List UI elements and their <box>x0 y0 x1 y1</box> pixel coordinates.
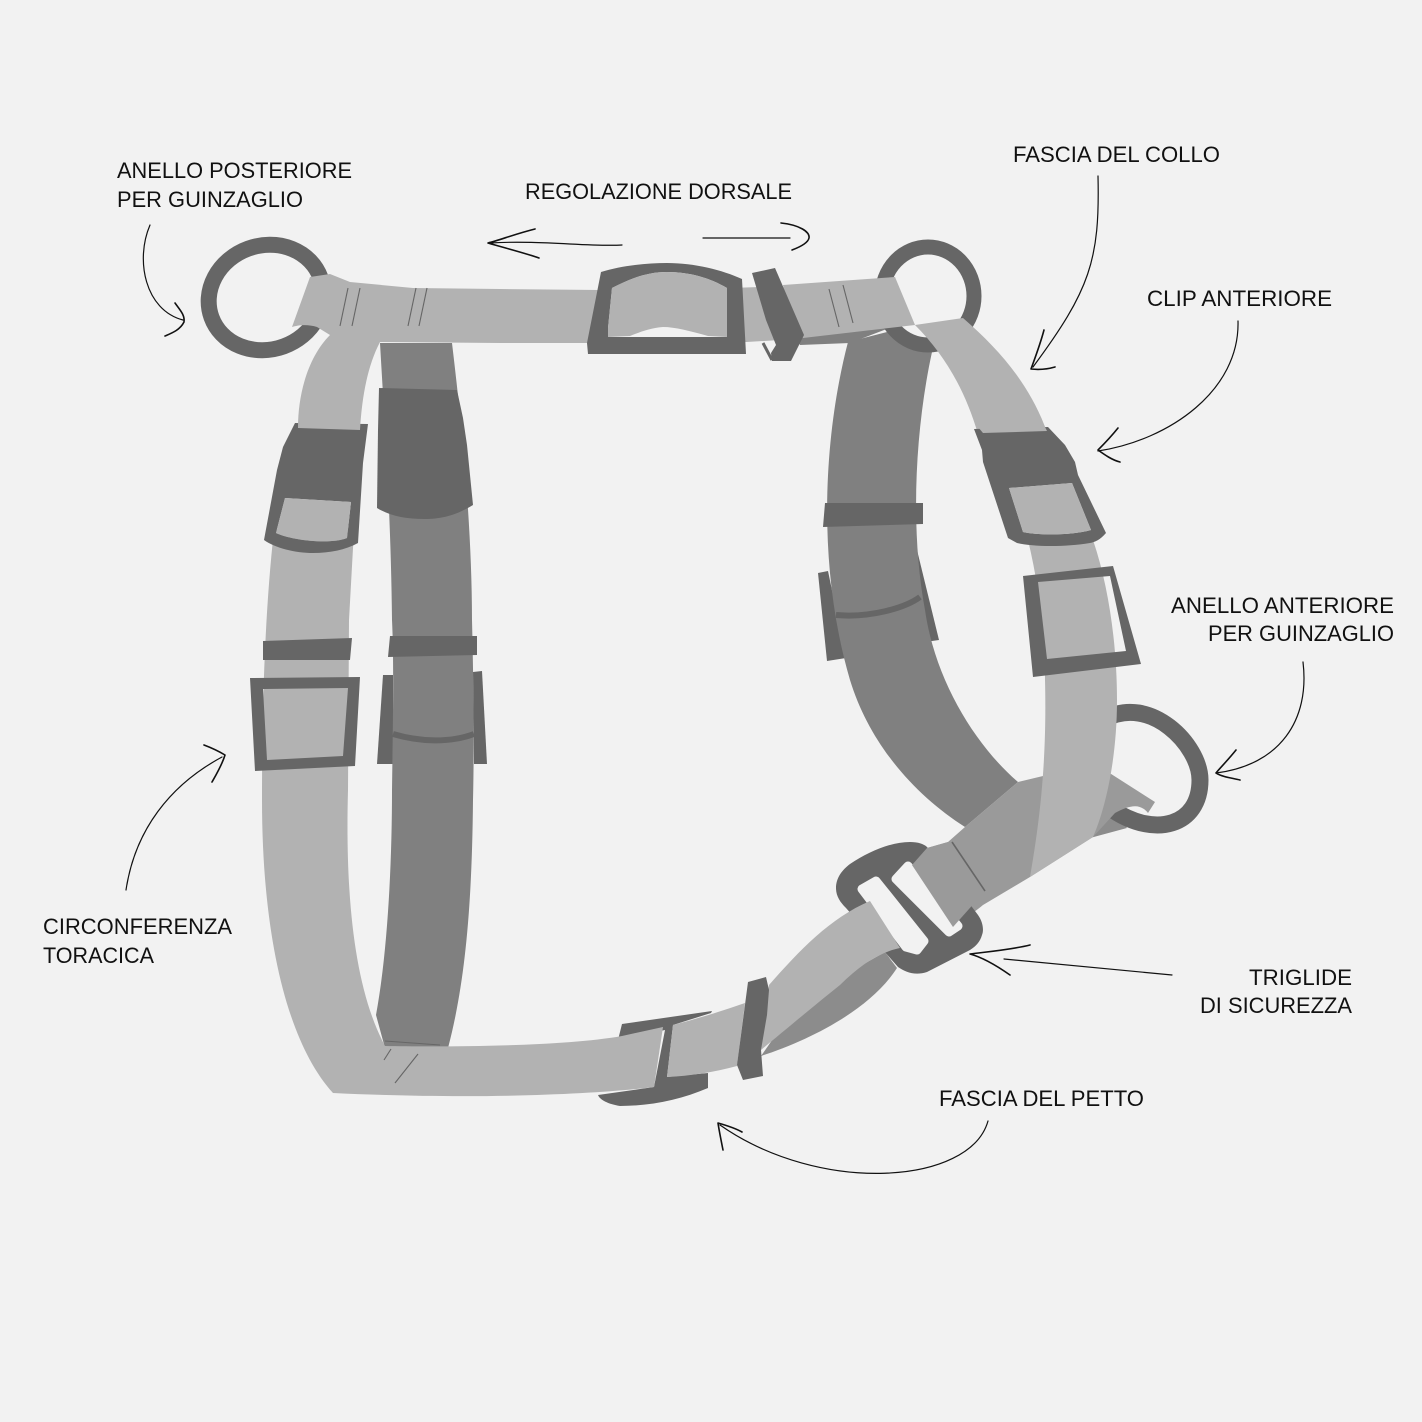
back adjuster buckle <box>587 263 746 354</box>
triglide <box>836 842 983 974</box>
left inner strap <box>376 343 474 1048</box>
arrow: anello posteriore <box>143 225 184 336</box>
back ring left <box>194 229 338 366</box>
neck strap front upper <box>915 318 1047 434</box>
back strap right of buckle <box>730 287 780 343</box>
arrow: fascia del collo <box>1031 176 1098 369</box>
neck and back strap left <box>292 274 600 430</box>
label: triglide di sicurezza: TRIGLIDE <box>1249 965 1352 990</box>
left inner seam <box>393 734 474 740</box>
arrow: clip anteriore <box>1098 321 1238 462</box>
label: circonferenza toracica: TORACICA <box>43 943 154 968</box>
girth stitches <box>384 1049 418 1083</box>
back strap right section <box>783 277 915 338</box>
label: clip anteriore: CLIP ANTERIORE <box>1147 286 1332 311</box>
label: anello posteriore per guinzaglio: PER GUINZAGLIO <box>117 187 303 212</box>
triglide frame <box>836 842 983 974</box>
label: anello anteriore per guinzaglio <box>1171 593 1394 646</box>
front ring tail <box>1090 800 1127 838</box>
label: circonferenza toracica <box>43 914 232 968</box>
label: anello anteriore per guinzaglio: ANELLO ANTERIORE <box>1171 593 1394 618</box>
arrow: regolazione right <box>703 223 809 250</box>
right rear buckle sides <box>818 550 939 661</box>
arrow: anello anteriore <box>1216 662 1304 780</box>
label: anello posteriore per guinzaglio: ANELLO POSTERIORE <box>117 158 352 183</box>
connector strap end over triglide <box>912 842 985 927</box>
neck strap front end <box>978 425 1047 433</box>
arrow: circonferenza toracica <box>126 745 225 890</box>
left clip window strap <box>276 498 351 541</box>
right inner band <box>823 503 923 527</box>
front rectangular buckle <box>1023 566 1141 677</box>
right inner strap <box>827 332 1018 827</box>
buckle window strap <box>608 272 727 337</box>
label: anello posteriore per guinzaglio <box>117 158 352 212</box>
left rectangular buckle <box>250 677 360 771</box>
label: triglide di sicurezza: DI SICUREZZA <box>1200 993 1352 1018</box>
chest band <box>737 977 769 1080</box>
back strap stitches right <box>829 285 853 327</box>
chest strap end through triglide <box>761 901 900 1050</box>
left inner strap sleeve <box>377 388 473 519</box>
triglide slots <box>862 866 958 950</box>
label: triglide di sicurezza <box>1200 965 1352 1018</box>
connector stitch <box>952 842 985 891</box>
chest connector strap <box>912 772 1155 927</box>
chest girth and chest strap <box>262 530 663 1096</box>
arrow: triglide <box>970 945 1172 975</box>
left clip <box>264 423 368 553</box>
label: circonferenza toracica: CIRCONFERENZA <box>43 914 232 939</box>
chest strap right section <box>667 1003 745 1077</box>
front clip window strap <box>1009 483 1091 534</box>
front D ring <box>1105 712 1200 825</box>
arrow: fascia del petto <box>718 1121 988 1173</box>
label: fascia del petto: FASCIA DEL PETTO <box>939 1086 1144 1111</box>
label: anello anteriore per guinzaglio: PER GUINZAGLIO <box>1208 621 1394 646</box>
chest buckle back <box>598 1011 712 1106</box>
left inner strap stitch <box>385 1041 440 1045</box>
label: regolazione dorsale: REGOLAZIONE DORSALE <box>525 179 792 204</box>
arrow: regolazione left <box>488 229 622 258</box>
harness illustration <box>194 229 1200 1106</box>
front clip <box>974 427 1106 546</box>
slider <box>752 268 804 361</box>
left inner band <box>388 636 477 657</box>
triglide underside strap <box>761 952 897 1056</box>
front girth strap <box>1028 540 1117 877</box>
back ring right <box>882 247 974 345</box>
label: fascia del collo: FASCIA DEL COLLO <box>1013 142 1220 167</box>
left girth band <box>263 638 352 660</box>
grey strip under neck strap <box>796 322 905 345</box>
right inner seam <box>836 597 920 616</box>
left rear buckle sides <box>377 671 487 764</box>
back strap stitches left <box>340 288 427 326</box>
